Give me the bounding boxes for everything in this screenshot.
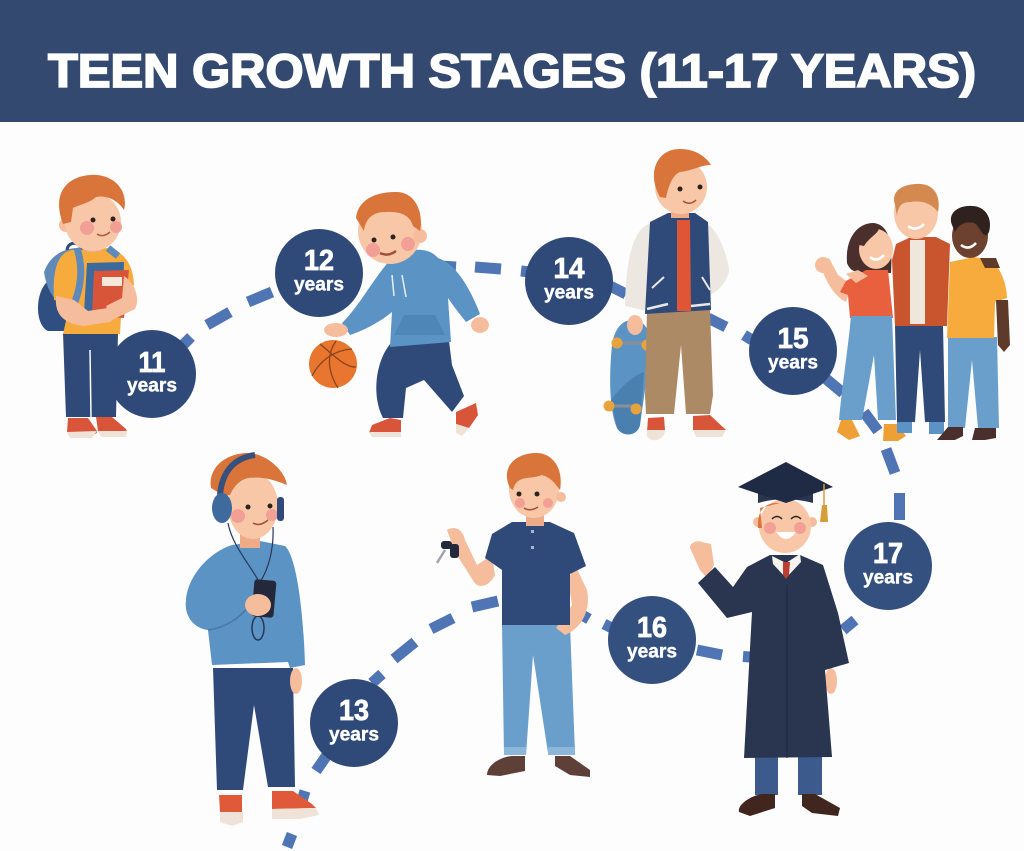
title: TEEN GROWTH STAGES (11-17 YEARS) xyxy=(48,44,976,97)
age badge: 12 years: 12 xyxy=(304,245,334,277)
basketball xyxy=(309,340,357,388)
age badge: 13 years: 13 xyxy=(339,695,369,727)
age badge: 12 years xyxy=(275,229,363,317)
figure: 16-year-old holding car keys xyxy=(437,453,590,777)
figure: 13-year-old with headphones and phone xyxy=(186,453,319,826)
age badge: 13 years: years xyxy=(329,724,379,746)
age badge: 16 years: years xyxy=(627,642,677,662)
figure: 17-year-old graduate in cap and gown xyxy=(690,462,849,816)
age badge: 16 years xyxy=(608,596,696,684)
skateboard xyxy=(604,320,652,434)
figure: 12-year-old dribbling a basketball xyxy=(309,192,489,437)
age badge: 12 years: years xyxy=(294,274,344,296)
age badge: 17 years: years xyxy=(863,568,913,588)
raised hand xyxy=(690,541,714,578)
age badge: 11 years xyxy=(108,330,196,418)
figure: 15-year-old friends group xyxy=(815,184,1010,441)
age badge: 13 years xyxy=(310,679,398,767)
headphones xyxy=(212,455,284,523)
middle boy xyxy=(846,184,950,434)
age badge: 16 years: 16 xyxy=(637,612,667,644)
age badge: 11 years: years xyxy=(127,376,177,396)
girl waving xyxy=(815,223,906,441)
dashed growth path xyxy=(183,266,900,847)
age badge: 14 years: 14 xyxy=(554,253,584,285)
figure: 11-year-old with backpack and books xyxy=(38,175,137,438)
title banner xyxy=(0,0,1024,122)
age badge: 14 years: years xyxy=(544,282,594,304)
graduation gown xyxy=(698,555,849,758)
figure: 14-year-old with varsity jacket and skateboard xyxy=(604,149,729,440)
age badge: 11 years: 11 xyxy=(138,347,166,379)
graduation cap xyxy=(738,462,833,522)
age badge: 14 years xyxy=(525,237,613,325)
age badge: 17 years: 17 xyxy=(873,538,903,570)
age badge: 15 years: 15 xyxy=(778,323,808,355)
age badge: 15 years xyxy=(749,307,837,395)
right boy xyxy=(937,206,1010,440)
phone with wired earphones xyxy=(228,523,277,640)
car keys xyxy=(437,541,459,563)
age badge: 17 years xyxy=(844,522,932,610)
age badge: 15 years: years xyxy=(768,352,818,374)
